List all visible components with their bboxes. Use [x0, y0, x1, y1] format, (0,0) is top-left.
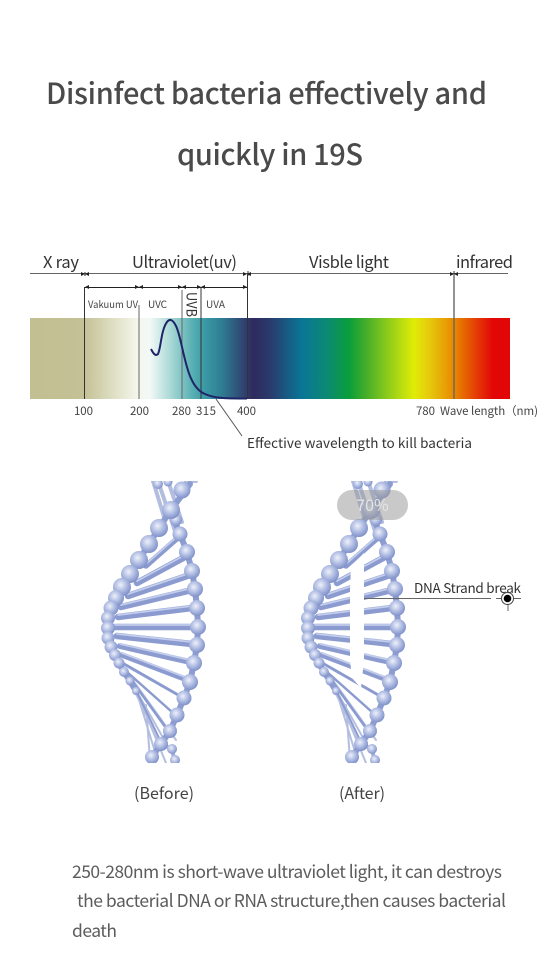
wavelength ticks: 280	[172, 403, 191, 419]
boundary lines	[84, 274, 454, 399]
sub-band labels: UVB	[182, 292, 202, 317]
callout	[216, 399, 472, 452]
break callout: DNA Strand break	[414, 577, 522, 597]
sub-band labels: Vakuum UV	[88, 296, 138, 311]
region labels: infrared	[456, 249, 513, 273]
title	[46, 71, 487, 174]
wavelength ticks: 780	[416, 403, 435, 419]
wavelength ticks: 315	[196, 403, 216, 419]
wavelength ticks: 100	[74, 403, 93, 419]
absorption curve	[151, 320, 247, 398]
description text: death	[72, 918, 117, 943]
sub-band labels	[88, 292, 226, 317]
strand break gap	[350, 553, 364, 688]
spectrum chart	[30, 249, 538, 452]
callout: Effective wavelength to kill bacteria	[247, 432, 472, 452]
description text: 250-280nm is short-wave ultraviolet light, it can destroys	[72, 859, 502, 884]
percent badge: 70%	[356, 492, 389, 516]
description text	[72, 859, 506, 943]
wavelength ticks	[74, 403, 538, 419]
before DNA illustration	[101, 478, 206, 765]
break callout	[364, 577, 522, 611]
percent badge	[337, 490, 408, 520]
wavelength ticks: 400	[237, 403, 256, 419]
region labels: X ray	[43, 249, 79, 273]
spectrum band	[30, 318, 510, 399]
DNA captions: (Before)	[134, 780, 194, 804]
wavelength ticks: 200	[130, 403, 149, 419]
DNA captions: (After)	[339, 780, 385, 804]
DNA captions	[134, 780, 385, 804]
sub-band labels: UVA	[206, 296, 226, 311]
region labels	[43, 249, 513, 273]
sub-band labels: UVC	[148, 296, 168, 311]
region axis with arrows	[30, 271, 508, 276]
title: Disinfect bacteria effectively and	[46, 71, 487, 113]
sub-band axis with arrows	[85, 285, 247, 289]
after DNA illustration	[301, 478, 522, 765]
title: quickly in 19S	[177, 132, 363, 174]
region labels: Visble light	[309, 249, 389, 273]
description text: the bacterial DNA or RNA structure,then causes bacterial	[77, 888, 506, 913]
region labels: Ultraviolet(uv)	[132, 249, 237, 273]
wavelength ticks: Wave length（nm)	[440, 403, 538, 419]
